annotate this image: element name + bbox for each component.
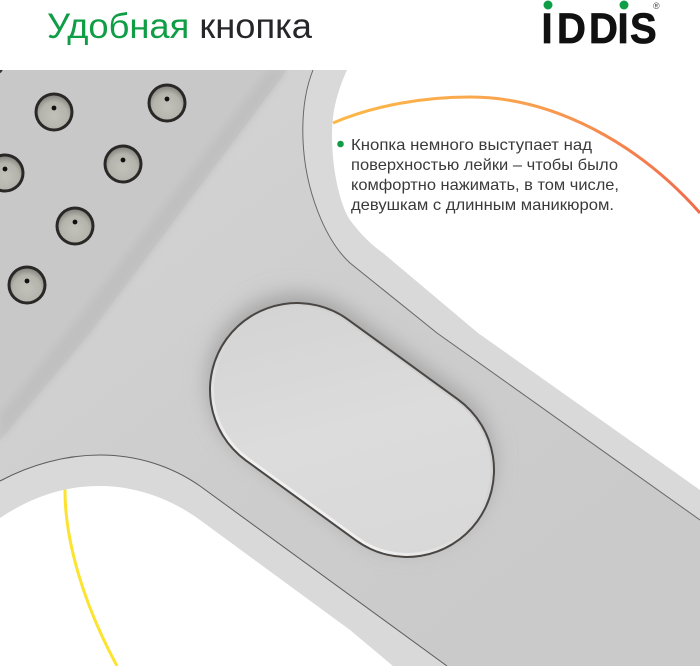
yellow arc [65,486,117,666]
bullet [337,141,344,147]
logo: IDDIS [542,4,657,52]
button [174,267,530,593]
callout text: поверхностью лейки – чтобы было [351,157,618,174]
callout text: Кнопка немного выступает над [351,137,593,154]
lower seam line [0,455,447,666]
registered mark: ® [653,1,660,11]
callout text [337,137,619,214]
upper seam line [303,70,700,520]
callout text: девушкам с длинным маникюром. [351,197,614,214]
sprayer face [0,70,264,407]
logo dots [544,0,552,10]
nozzle row [0,62,186,304]
orange arc [333,97,700,213]
button halo shadow [200,286,501,548]
diagonal shading [53,80,280,360]
title: Удобная кнопка [47,7,313,46]
callout text: комфортно нажимать, в том числе, [351,177,619,194]
